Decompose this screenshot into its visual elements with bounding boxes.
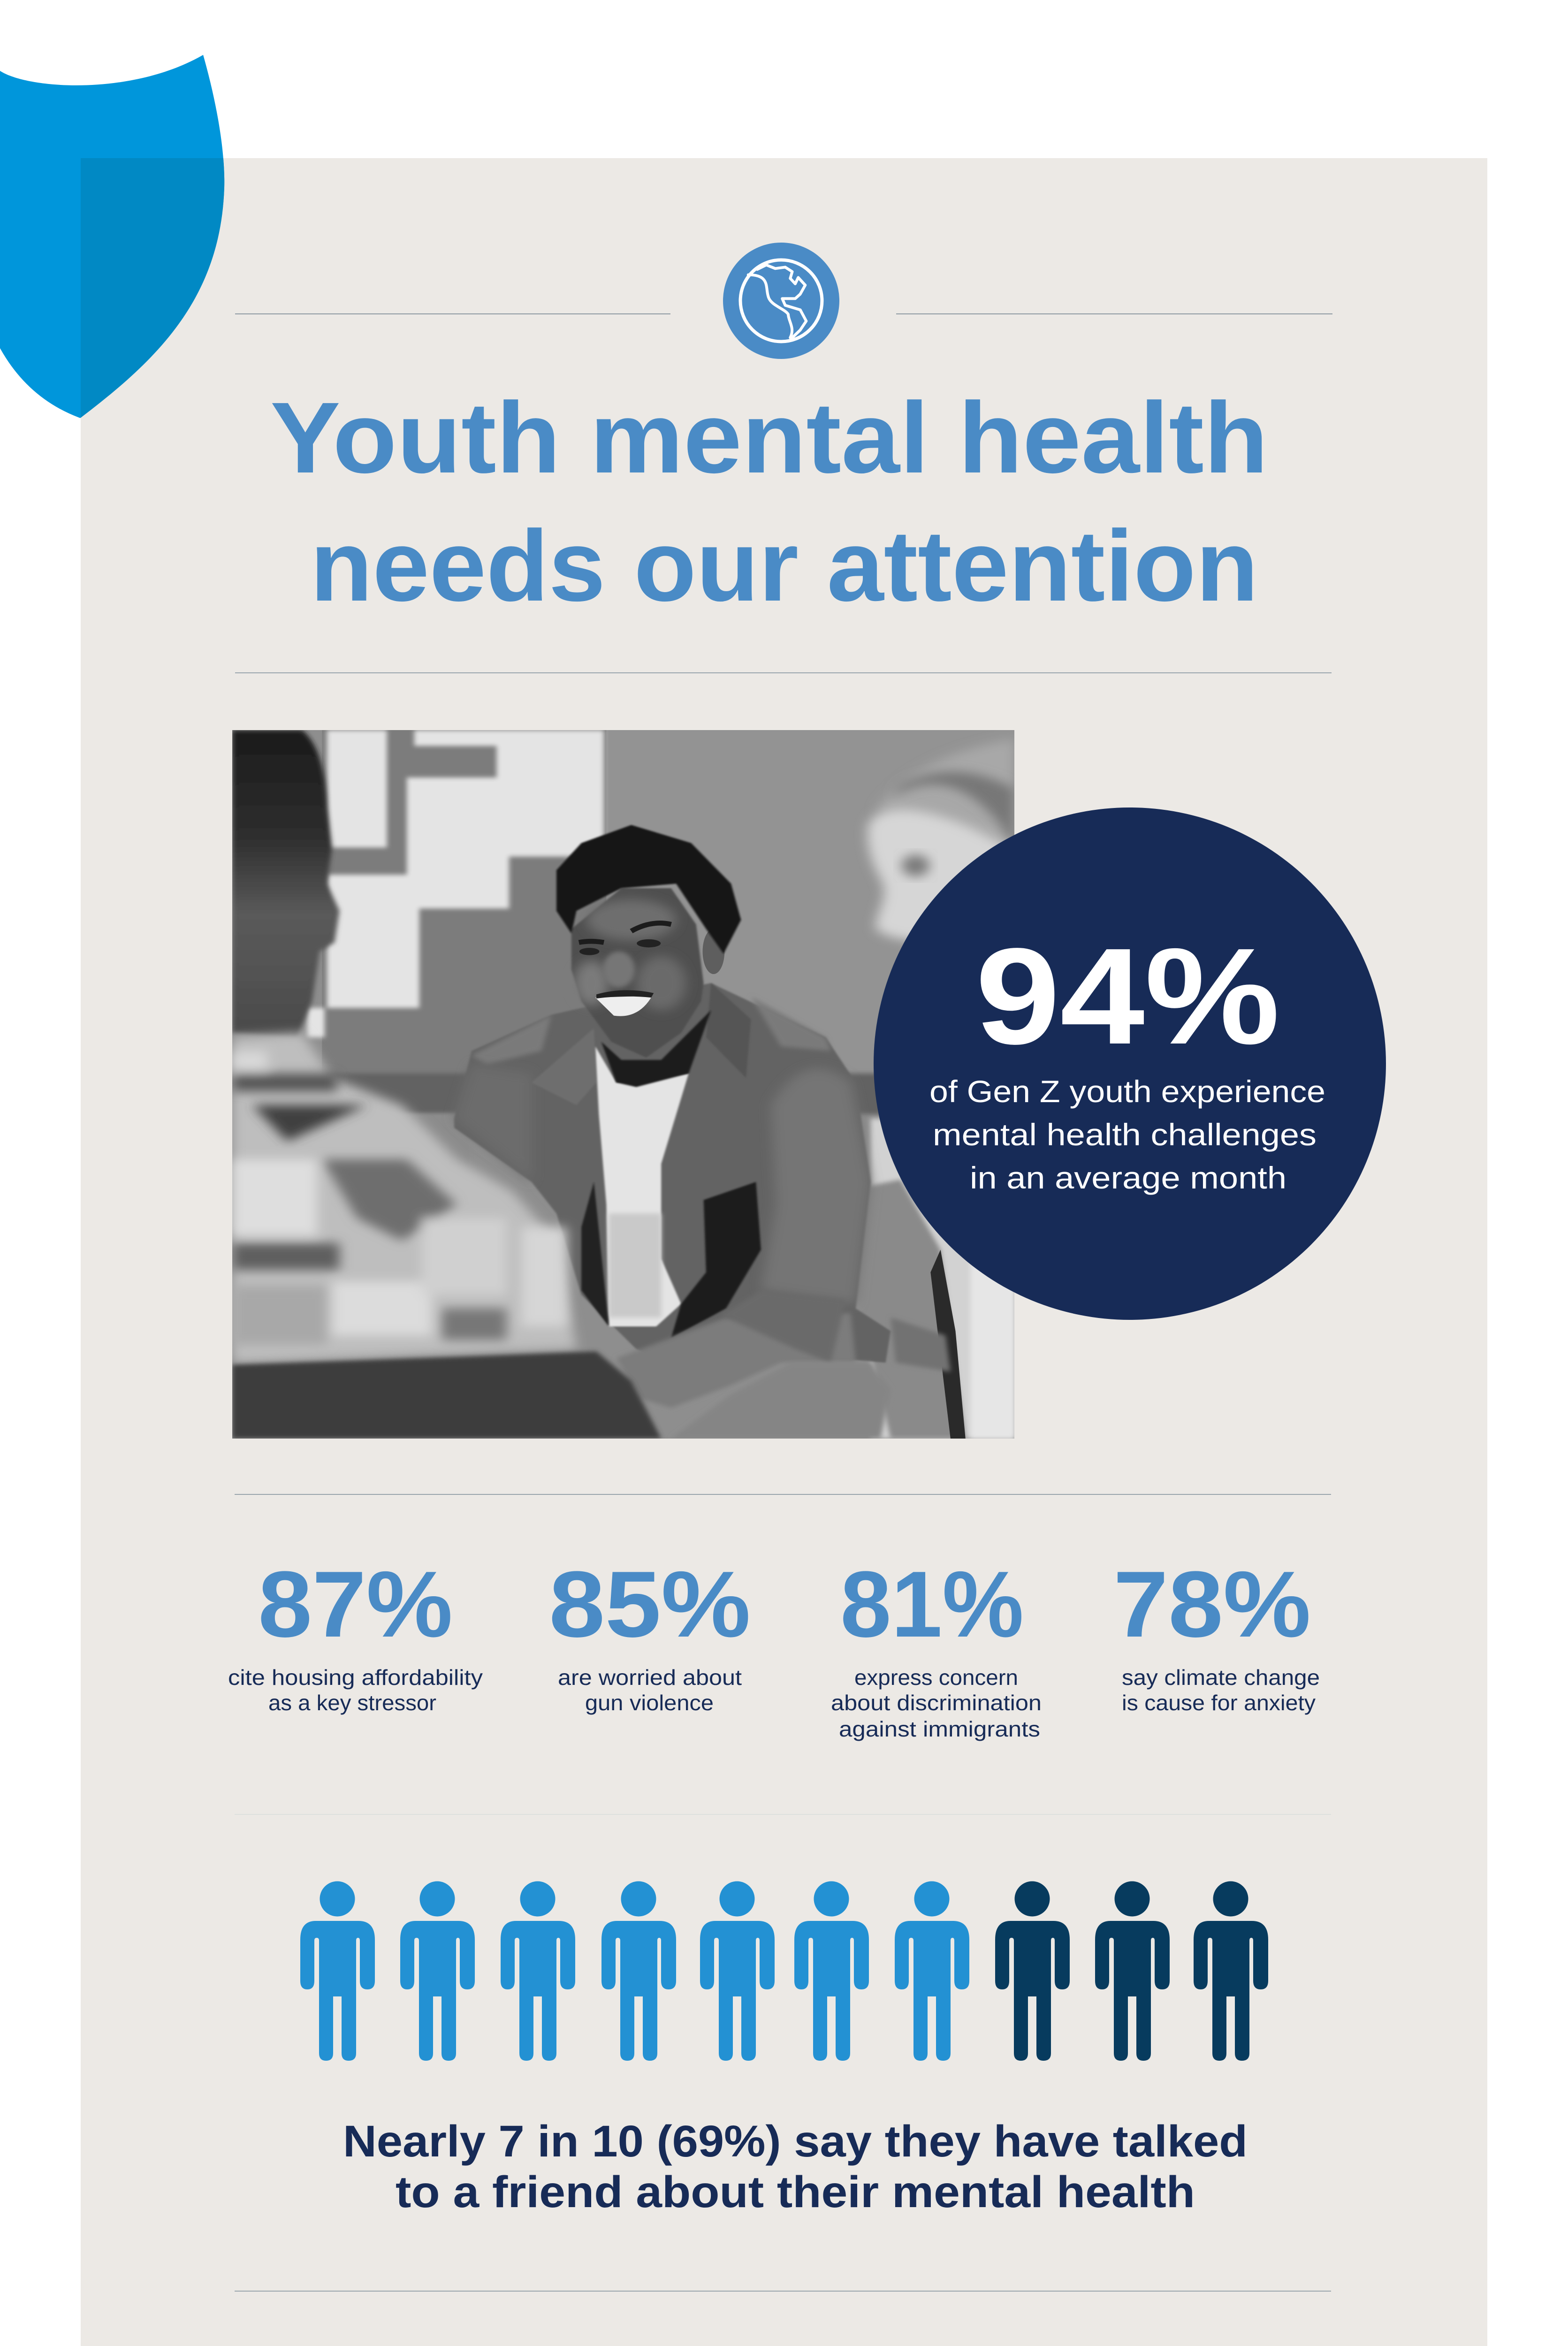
callout: 94% circle [874,807,1386,1320]
forearm and jeans [617,1313,856,1408]
blurred foreground person [232,730,340,1037]
stat: 81%: 81% [840,1552,1024,1657]
callout text: in an average month [970,1160,1286,1195]
stat: 81%: about discrimination [831,1691,1042,1715]
white tee and inner dark [595,1046,689,1326]
stat: 78% [1113,1552,1320,1715]
photo: smiling young man in group [232,730,1014,1439]
stat: 81% [831,1552,1042,1741]
text: friend statistic: to a friend about their mental health [396,2167,1195,2217]
stat: 85%: 85% [549,1552,751,1657]
man jacket [454,983,891,1363]
stat: 87%: 87% [258,1552,453,1657]
icon: globe [723,243,839,359]
stat: 85%: gun violence [585,1691,714,1715]
stat: 94%: 94% [975,920,1280,1073]
stat: 81%: express concern [854,1665,1018,1690]
icon: blue shield corner [0,55,224,418]
title [270,381,1268,622]
blonde woman behind [875,739,1014,847]
callout text: mental health challenges [933,1117,1317,1152]
heading rule: left [235,313,670,314]
stat: 87%: as a key stressor [268,1691,436,1715]
text: friend statistic [343,2117,1248,2217]
face [571,888,704,1058]
stat: 81%: against immigrants [839,1717,1040,1741]
callout text [929,1074,1325,1195]
stat: 78%: 78% [1113,1552,1311,1657]
title: Youth mental health [270,381,1268,494]
text: friend statistic: Nearly 7 in 10 (69%) say they have talked [343,2117,1248,2166]
stat: 85% [549,1552,751,1715]
title: needs our attention [310,509,1258,622]
stat: 85%: are worried about [558,1665,742,1690]
stat: 78%: is cause for anxiety [1122,1691,1316,1715]
pictogram: 7 of 10 people [300,1881,1268,2061]
stat: 87% [228,1552,483,1715]
stat: 78%: say climate change [1122,1665,1320,1690]
callout text: of Gen Z youth experience [929,1074,1325,1109]
stat: 87%: cite housing affordability [228,1665,483,1690]
heading rule: right [896,313,1332,314]
